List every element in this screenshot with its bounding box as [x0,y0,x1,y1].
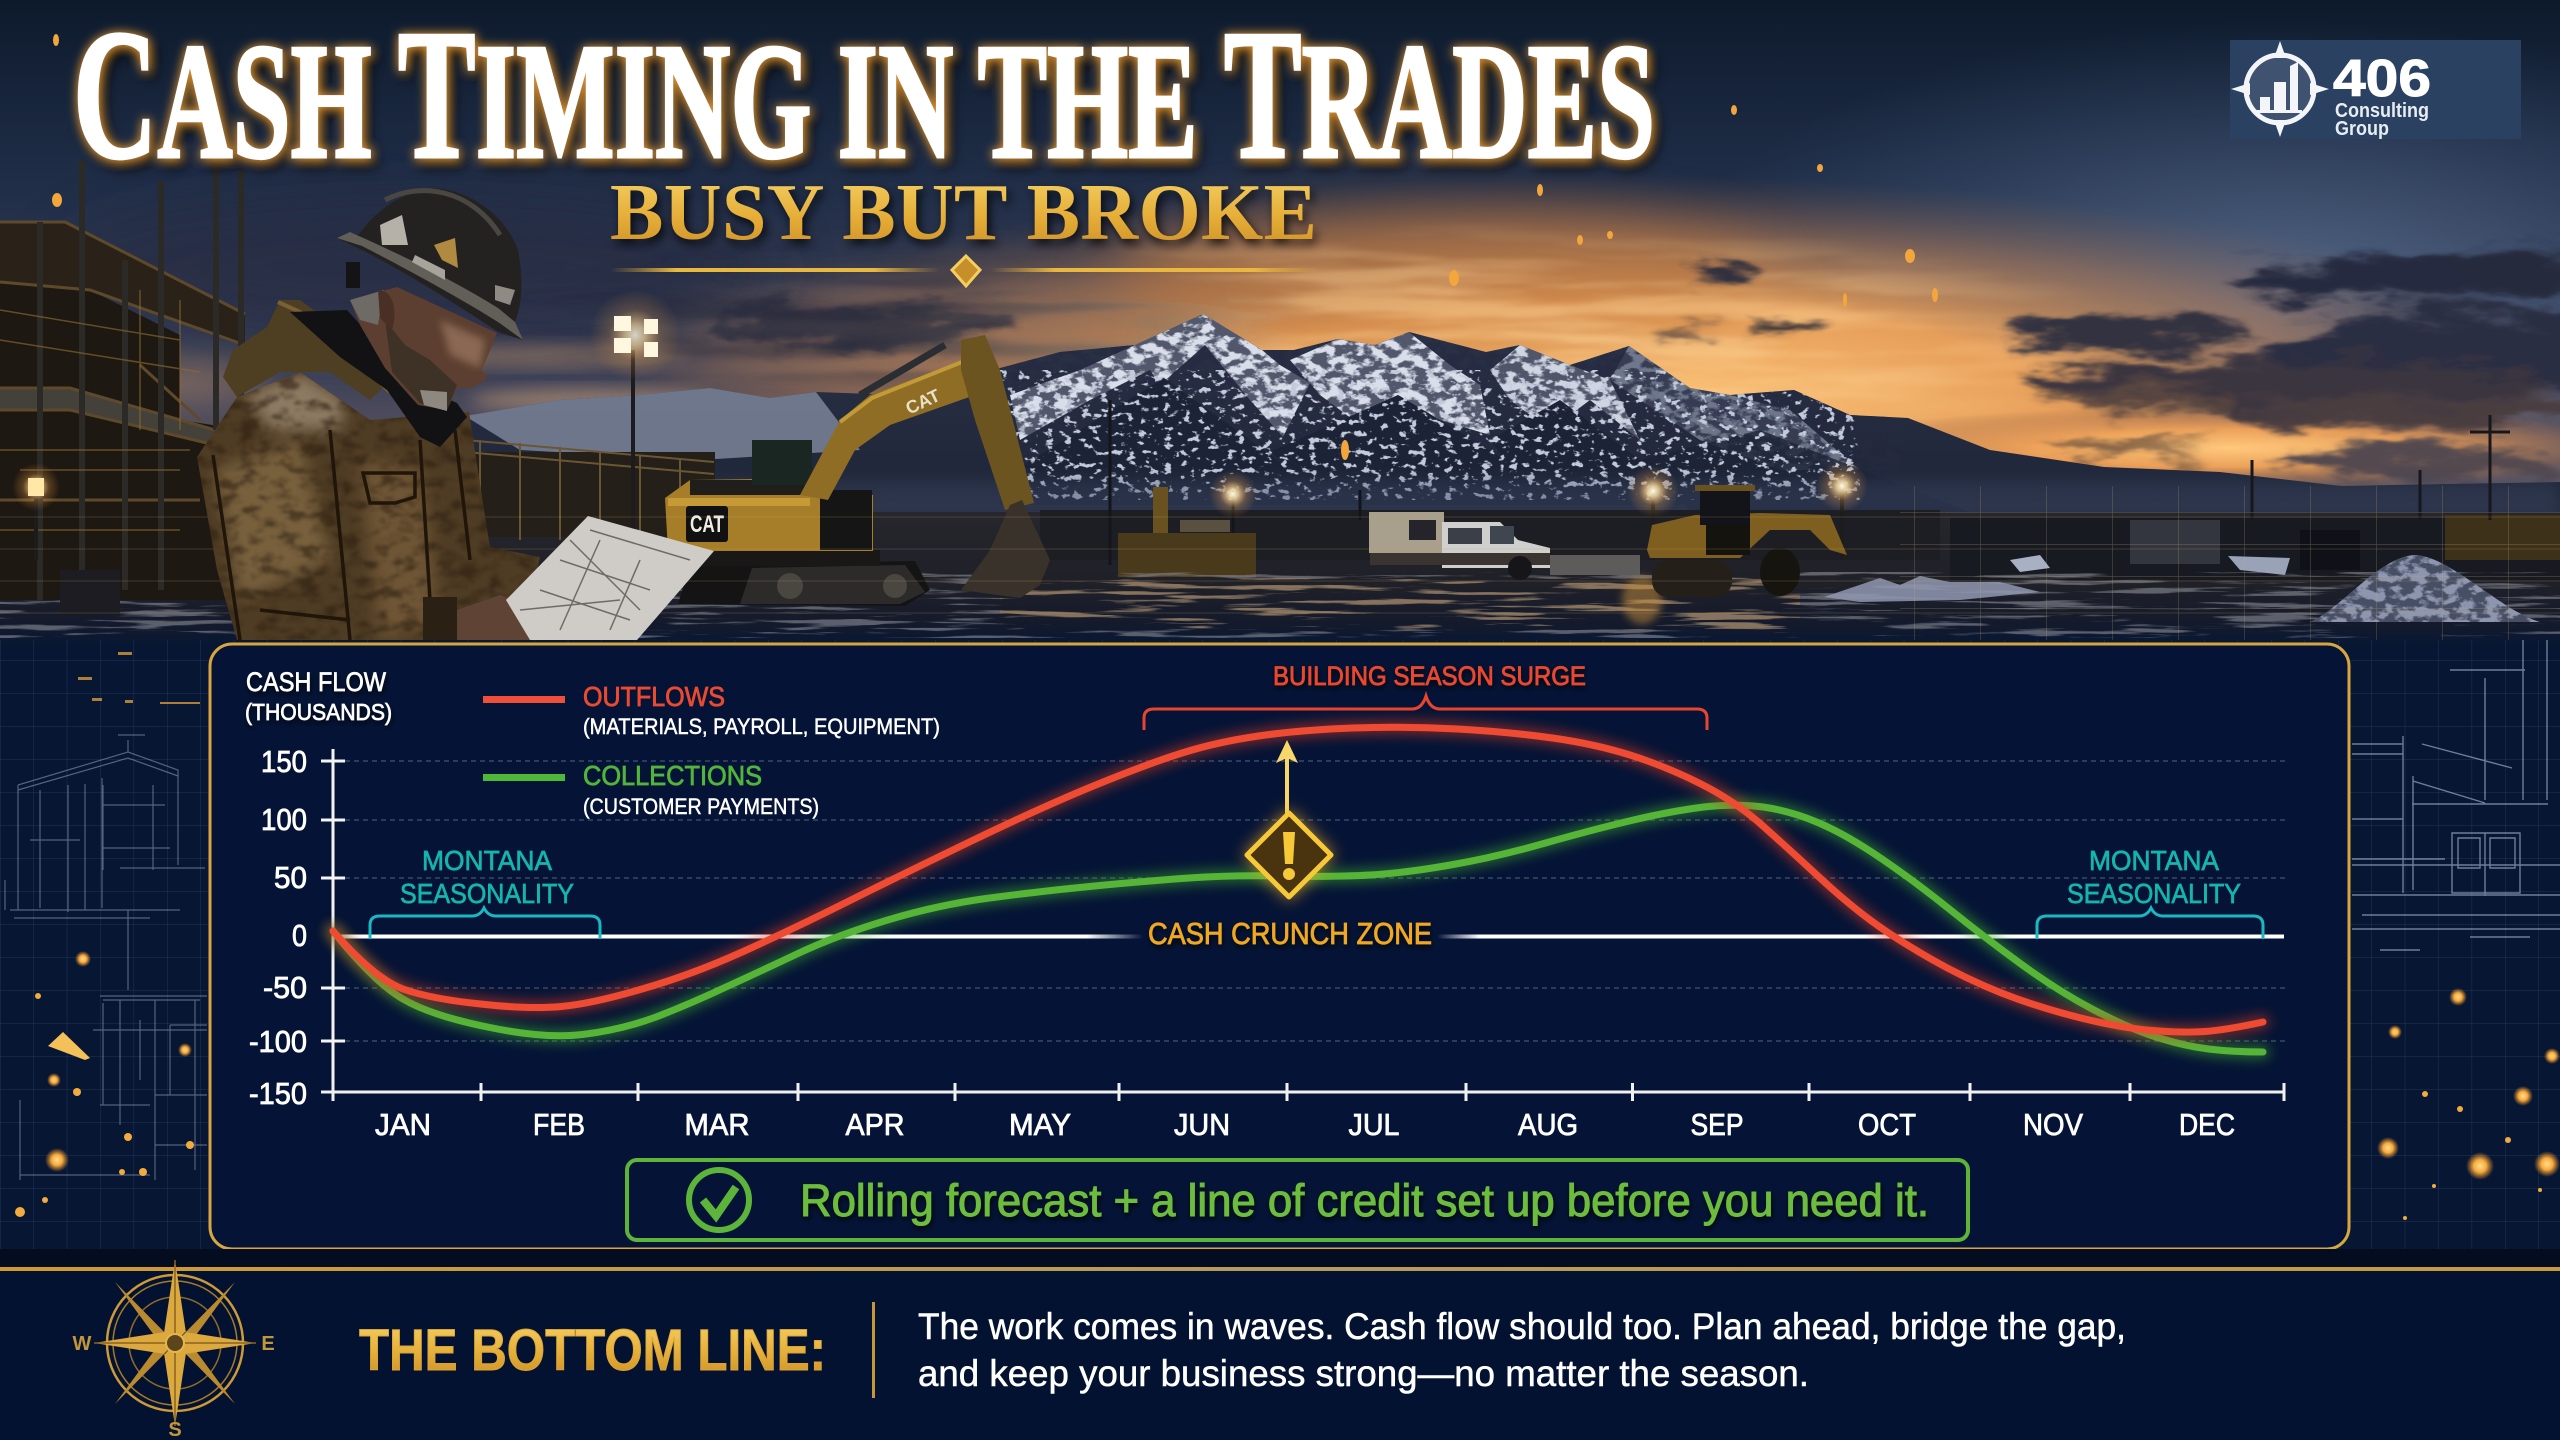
excavator CAT logo: CAT [690,511,724,538]
logo: Group [2335,118,2389,140]
mountains [470,314,2560,512]
logo [2230,40,2521,140]
x axis with month labels: DEC [2179,1107,2235,1142]
distant town [1040,400,2560,580]
icon: gold compass rose: W [73,1333,92,1355]
x axis with month labels: SEP [1690,1107,1744,1142]
y axis with value labels: 150 [261,744,307,779]
y axis with value labels: 50 [274,860,307,895]
legend: collections: COLLECTIONS [583,760,762,791]
subtitle divider with diamond [610,256,1320,286]
x axis with month labels: FEB [533,1107,585,1142]
top edge of blueprint area: smudged amber marks [78,652,200,704]
zero line [333,934,2284,938]
collections curve [333,805,2263,1052]
left margin blueprint sketches [5,735,207,1180]
callout: rolling forecast: Rolling forecast + a line of credit set up before you need it. [800,1175,1929,1226]
brace and label: Montana seasonality right: MONTANA [2089,845,2219,876]
y axis title [245,667,392,725]
brace and label: Montana seasonality left: SEASONALITY [400,878,574,909]
ember sparks on margins [15,951,2560,1220]
embers in sky [52,34,1938,460]
legend: collections [483,760,819,819]
logo: Consulting [2335,100,2429,122]
blueprint grid on margins [0,640,2560,1270]
bottom line heading: THE BOTTOM LINE: [359,1318,826,1383]
legend: collections: (CUSTOMER PAYMENTS) [583,794,819,819]
y axis with value labels: -100 [249,1024,307,1059]
cash crunch zone label: CASH CRUNCH ZONE [1148,916,1432,951]
x axis with month labels: NOV [2023,1107,2083,1142]
x axis with month labels: OCT [1858,1107,1916,1142]
x axis with month labels: MAR [684,1107,750,1142]
logo compass mark [2231,41,2329,137]
hand [457,595,547,640]
x axis with month labels [321,1083,2284,1142]
hard hat [337,188,523,340]
clouds [1659,244,2560,483]
lower snow speckles [1000,370,1860,500]
brace and label: Montana seasonality left [370,845,600,939]
snow breakup [1000,310,1900,470]
x axis with month labels: MAY [1009,1107,1071,1142]
right margin blueprint sketches [2352,640,2560,950]
valley haze [440,480,2560,520]
sky [0,0,2560,645]
legend: outflows: (MATERIALS, PAYROLL, EQUIPMENT) [583,714,940,739]
divider [872,1302,875,1398]
grid lines [345,761,2285,1041]
legend: outflows [483,681,940,739]
bottom line text: and keep your business strong—no matter the season. [918,1353,1809,1394]
x axis with month labels: APR [846,1107,904,1142]
y axis with value labels: -50 [263,970,307,1005]
x axis with month labels: AUG [1518,1107,1578,1142]
neck and face [350,287,497,410]
left mountains [470,388,860,460]
bottom band [0,1249,2560,1440]
gold arrow up to peak [1276,740,1298,815]
jacket [197,372,540,640]
y axis with value labels: 0 [292,918,307,953]
callout: rolling forecast [627,1160,1968,1240]
brace and label: Montana seasonality left: MONTANA [422,845,552,876]
blueprint plans [506,516,714,640]
hood [223,300,400,400]
photo grid overlay [0,486,2560,640]
muddy reflections [0,572,2560,638]
brace: building season surge: BUILDING SEASON SURGE [1273,661,1586,691]
y axis title: CASH FLOW [246,667,386,697]
brace and label: Montana seasonality right: SEASONALITY [2067,878,2241,909]
bottom line text: The work comes in waves. Cash flow should too. Plan ahead, bridge the gap, [918,1306,2126,1347]
x axis with month labels: JUL [1348,1107,1400,1142]
icon: check circle [689,1170,749,1230]
subtitle: BUSY BUT BROKE [610,169,1317,257]
photo backdrop: construction site at sunset [0,0,2560,645]
y axis with value labels: 100 [261,802,307,837]
x axis with month labels: JUN [1174,1107,1230,1142]
brace: building season surge [1144,661,1707,730]
excavator [665,335,1050,606]
work trucks [1369,512,1640,580]
bottom line text [918,1306,2126,1394]
outflows curve [333,727,2263,1032]
warning diamond [1243,809,1335,901]
boom CAT logo: CAT [902,385,943,418]
ground [0,512,2560,644]
x axis with month labels: JAN [375,1107,431,1142]
icon: gold compass rose: E [261,1333,275,1355]
snow piles [1824,555,2540,622]
icon: gold compass rose [73,1260,275,1440]
legend: outflows: OUTFLOWS [583,681,725,712]
foreground dark ridges [1026,378,1860,470]
brace and label: Montana seasonality right [2037,845,2263,939]
y axis title: (THOUSANDS) [245,699,392,725]
collar and hoodie [290,310,467,447]
panel: cash flow chart [210,644,2349,1249]
y axis with value labels [249,744,345,1111]
distant structure silhouette [465,440,715,540]
wheel loader [1647,485,1847,597]
site lamps [12,289,1868,560]
scaffolding building [0,160,245,614]
snow fields [1010,314,1860,470]
y axis with value labels: -150 [249,1076,307,1111]
worker with hard hat reading plans [190,188,714,640]
logo wordmark: 406 [2333,50,2431,108]
